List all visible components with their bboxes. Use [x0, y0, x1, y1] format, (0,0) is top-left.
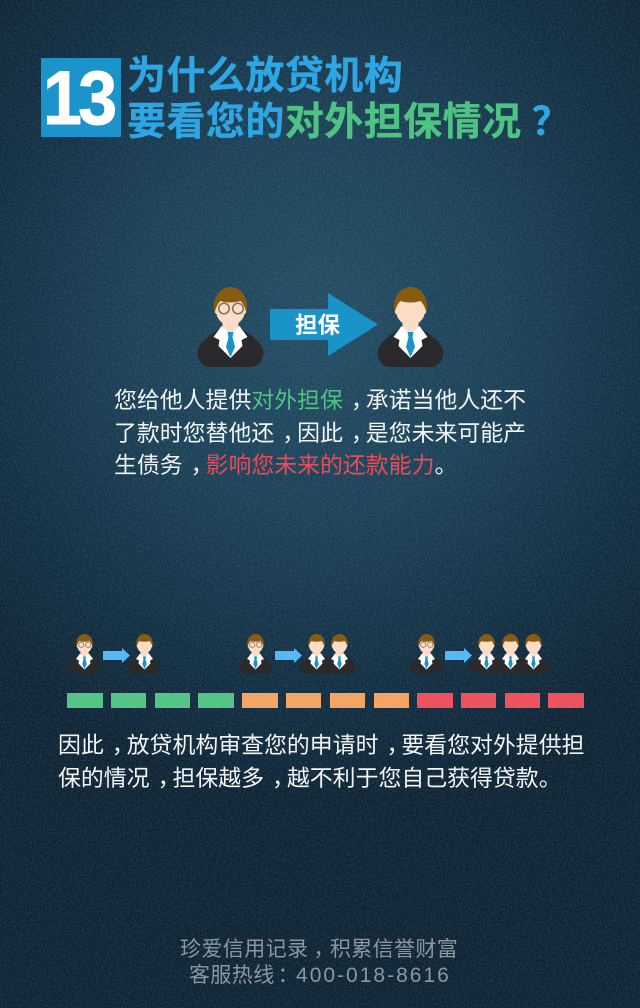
footer slogan and hotline — [180, 938, 458, 987]
explanation text: 了款时您替他还 ，因此 ，是您未来可能产 — [114, 420, 526, 446]
explanation text — [114, 387, 526, 478]
risk bar scale — [67, 693, 584, 708]
arrow: guarantee — [270, 293, 378, 356]
title line 2: 要看您的对外担保情况 ？ — [127, 101, 571, 144]
icon: guarantor person — [198, 287, 264, 367]
conclusion text: 因此 ，放贷机构审查您的申请时 ，要看您对外提供担 — [58, 732, 584, 758]
diagram: two guarantees — [239, 634, 356, 674]
arrow: guarantee: 担保 — [295, 313, 341, 338]
diagram: one guarantee — [68, 634, 161, 674]
explanation text: 生债务 ，影响您未来的还款能力。 — [114, 452, 457, 478]
title line 1: 为什么放贷机构 — [127, 55, 403, 98]
footer slogan and hotline: 珍爱信用记录，积累信誉财富 — [180, 938, 458, 961]
footer slogan and hotline: 客服热线：400-018-8616 — [189, 964, 451, 987]
conclusion text — [58, 732, 584, 790]
explanation text: 您给他人提供对外担保 ，承诺当他人还不 — [114, 387, 526, 413]
icon: borrower person — [378, 287, 444, 367]
diagram: three guarantees — [410, 634, 550, 674]
conclusion text: 保的情况 ，担保越多 ，越不利于您自己获得贷款。 — [58, 764, 562, 790]
